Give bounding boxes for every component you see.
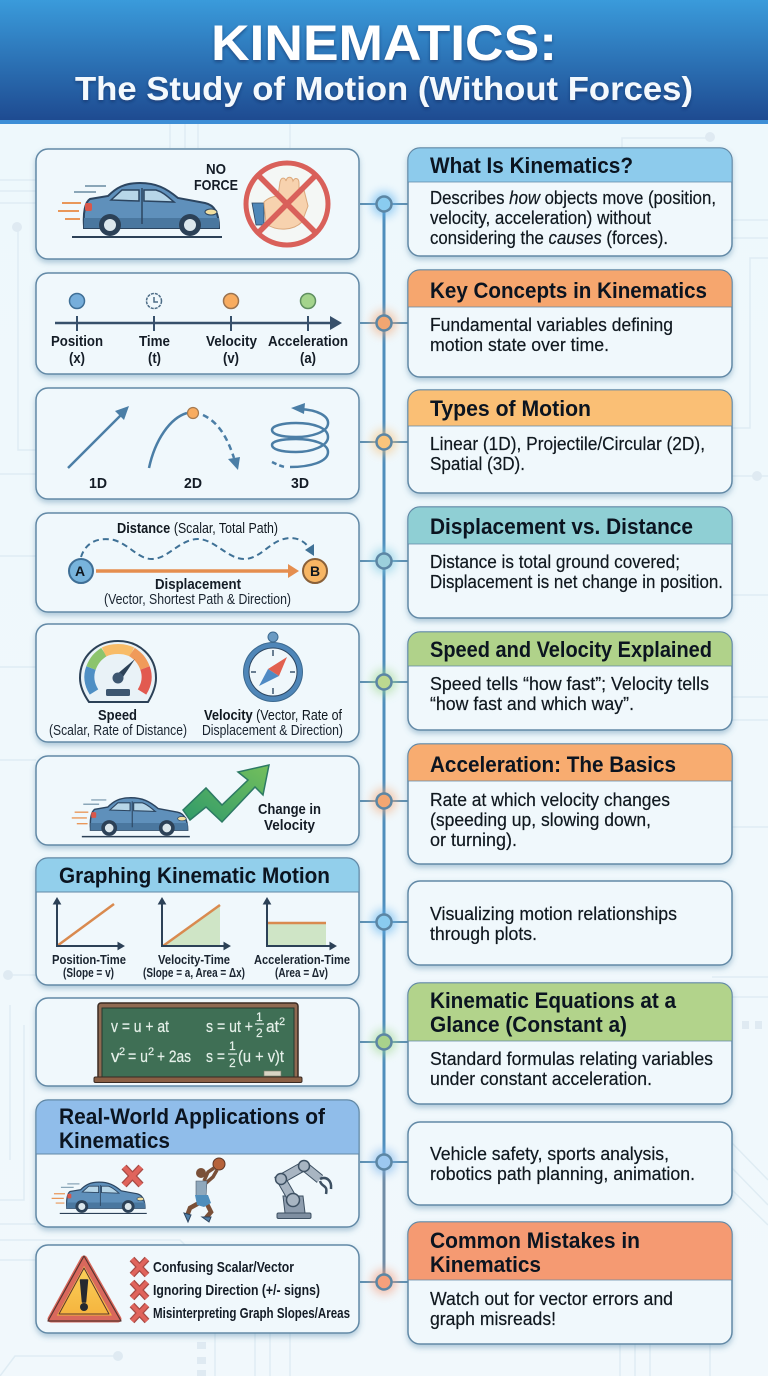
chart: position-time (54, 898, 124, 950)
body text: under constant acceleration. (430, 1069, 652, 1089)
arrow: distance path (81, 538, 314, 559)
body text: Spatial (3D). (430, 454, 525, 474)
timeline nodes (372, 192, 396, 1294)
velocity label: Displacement & Direction) (202, 723, 343, 739)
icon: moving car (58, 183, 222, 237)
concept labels: Acceleration (268, 333, 348, 350)
point B (303, 559, 327, 583)
chalkboard (94, 1003, 302, 1082)
body text (430, 674, 709, 714)
heading: Key Concepts in Kinematics (430, 278, 707, 303)
title banner (0, 0, 768, 124)
icon: speedometer (80, 641, 156, 702)
graph captions: (Slope = v) (63, 966, 114, 980)
arrow: 1D linear (68, 406, 129, 468)
body text: through plots. (430, 924, 537, 944)
heading: Graphing Kinematic Motion (59, 863, 330, 888)
concept labels: (a) (300, 350, 316, 367)
panel: speed and velocity (36, 624, 359, 742)
heading: Kinematic Equations at a (430, 988, 677, 1013)
icon: acceleration dot (300, 294, 316, 308)
body text: (speeding up, slowing down, (430, 810, 651, 830)
equations (111, 1010, 285, 1070)
icon: prohibited force hand (246, 163, 328, 245)
equations: 2 (256, 1026, 263, 1040)
heading: What Is Kinematics? (430, 153, 633, 178)
equations: at (266, 1017, 279, 1036)
body text (430, 552, 723, 592)
equations: 2 (229, 1056, 236, 1070)
speed label (49, 707, 187, 739)
icon: compass (243, 632, 303, 702)
mistakes list: Ignoring Direction (+/- signs) (153, 1282, 320, 1299)
body text: Fundamental variables defining (430, 315, 673, 335)
chart: velocity-time (158, 898, 230, 950)
body text: Watch out for vector errors and (430, 1289, 673, 1309)
panel: displacement vs distance (36, 513, 359, 612)
card: speed and velocity (408, 632, 732, 730)
concept labels: (x) (69, 350, 85, 367)
equations: 2 (148, 1046, 154, 1058)
change in velocity label: Change in (258, 801, 321, 818)
arrow: displacement (96, 564, 299, 578)
arrow: 2D projectile (149, 408, 240, 470)
body text: Standard formulas relating variables (430, 1049, 713, 1069)
concept labels (51, 333, 348, 367)
speed label: Speed (98, 707, 137, 724)
body text: Rate at which velocity changes (430, 790, 670, 810)
equations: s = ut + (206, 1017, 253, 1036)
displacement label: (Vector, Shortest Path & Direction) (104, 592, 291, 608)
heading (36, 1100, 359, 1154)
body text: or turning). (430, 830, 517, 850)
card: applications text (408, 1122, 732, 1205)
heading: Real-World Applications of (59, 1104, 326, 1129)
displacement label: Displacement (155, 576, 241, 593)
body text: robotics path planning, animation. (430, 1164, 695, 1184)
body text (430, 434, 705, 474)
equations: (u + v)t (238, 1047, 284, 1066)
equations: s = (206, 1047, 225, 1066)
velocity label: Velocity (Vector, Rate of (204, 707, 343, 724)
concept labels: Time (139, 333, 170, 350)
icon: warning triangle (48, 1256, 121, 1321)
concept labels: Velocity (206, 333, 258, 350)
body text: velocity, acceleration) without (430, 208, 651, 228)
no force label: FORCE (194, 177, 238, 194)
no force label: NO (206, 161, 226, 178)
equations: v = u + at (111, 1017, 169, 1036)
subtitle: The Study of Motion (Without Forces) (75, 70, 693, 107)
body text: “how fast and which way”. (430, 694, 634, 714)
body text: Linear (1D), Projectile/Circular (2D), (430, 434, 705, 454)
body text: graph misreads! (430, 1309, 556, 1329)
equations: + 2as (157, 1047, 191, 1066)
arrow: rising zigzag (183, 765, 269, 822)
equations: 1 (256, 1010, 263, 1024)
body text: Visualizing motion relationships (430, 904, 677, 924)
panel: common mistakes (36, 1245, 359, 1333)
body text: Distance is total ground covered; (430, 552, 680, 572)
graph captions: Acceleration-Time (254, 953, 350, 967)
body text: motion state over time. (430, 335, 609, 355)
body text (430, 1049, 713, 1089)
body text (430, 1289, 673, 1329)
mistakes list: Confusing Scalar/Vector (153, 1259, 294, 1276)
card: what is kinematics (408, 148, 732, 256)
card: graphing text (408, 881, 732, 965)
dimension labels (89, 475, 309, 492)
heading: Common Mistakes in (430, 1228, 640, 1253)
card: acceleration basics (408, 744, 732, 864)
body text (430, 790, 670, 850)
heading: Speed and Velocity Explained (430, 637, 712, 662)
panel: key concepts timeline (36, 273, 359, 374)
icon: basketball player (184, 1158, 225, 1222)
panel: no force illustration (36, 149, 359, 259)
dimension labels: 3D (291, 475, 309, 492)
graph captions: (Slope = a, Area = Δx) (143, 966, 245, 980)
dimension labels: 2D (184, 475, 202, 492)
graph captions (52, 953, 350, 980)
card: types of motion (408, 390, 732, 493)
panel: types of motion (36, 388, 359, 499)
heading: Glance (Constant a) (430, 1012, 627, 1037)
body text (430, 1144, 695, 1184)
no force label (194, 161, 238, 194)
central timeline spine (360, 204, 408, 1282)
panel: real-world applications (36, 1100, 359, 1227)
icon: velocity dot (224, 294, 238, 308)
chart: acceleration-time (264, 898, 336, 950)
icon: car (52, 1182, 147, 1213)
heading (430, 1228, 640, 1277)
concept labels: (v) (223, 350, 239, 367)
arrow: 3D spiral (272, 403, 328, 467)
body text (430, 904, 677, 944)
point A: A (75, 563, 85, 579)
heading: Kinematics (59, 1128, 170, 1153)
arrow: time axis (55, 316, 342, 331)
body text: considering the causes (forces). (430, 228, 668, 248)
heading: Displacement vs. Distance (430, 514, 693, 539)
equations: 2 (119, 1046, 125, 1058)
card: kinematic equations (408, 983, 732, 1104)
displacement label (104, 576, 291, 608)
heading: Acceleration: The Basics (430, 752, 676, 777)
card: key concepts (408, 270, 732, 377)
body text (430, 315, 673, 355)
point B: B (310, 563, 320, 579)
heading: Types of Motion (430, 396, 591, 421)
icon: clock (146, 294, 162, 308)
dimension labels: 1D (89, 475, 107, 492)
speed label: (Scalar, Rate of Distance) (49, 723, 187, 739)
equations: v (111, 1047, 120, 1066)
distance label: Distance (Scalar, Total Path) (117, 520, 278, 537)
body text: Speed tells “how fast”; Velocity tells (430, 674, 709, 694)
heading (36, 858, 359, 892)
body text: Vehicle safety, sports analysis, (430, 1144, 669, 1164)
icon: moving car (72, 798, 190, 837)
graph captions: (Area = Δv) (275, 966, 328, 980)
body text (430, 188, 716, 248)
point A (69, 559, 93, 583)
concept labels: (t) (148, 350, 161, 367)
body text: Displacement is net change in position. (430, 572, 723, 592)
equations: = u (128, 1047, 148, 1066)
graph captions: Velocity-Time (158, 953, 230, 967)
card: displacement vs distance (408, 507, 732, 618)
mistakes list: Misinterpreting Graph Slopes/Areas (153, 1305, 350, 1322)
equations: 2 (279, 1016, 285, 1028)
concept labels: Position (51, 333, 103, 350)
change in velocity label: Velocity (264, 817, 316, 834)
card: common mistakes (408, 1222, 732, 1344)
velocity label (202, 707, 343, 739)
body text: Describes how objects move (position, (430, 188, 716, 208)
panel: acceleration (36, 756, 359, 845)
equations: 1 (229, 1039, 236, 1053)
panel: graphing kinematic motion (36, 858, 359, 985)
panel: equations blackboard (36, 998, 359, 1086)
mistakes list (132, 1259, 350, 1322)
icon: robot arm (276, 1160, 331, 1218)
heading (430, 988, 677, 1037)
graph captions: Position-Time (52, 953, 126, 967)
change in velocity label (258, 801, 321, 834)
title: KINEMATICS: (211, 15, 557, 71)
icon: position dot (70, 294, 84, 308)
icon: red cross (124, 1167, 141, 1185)
heading: Kinematics (430, 1252, 541, 1277)
